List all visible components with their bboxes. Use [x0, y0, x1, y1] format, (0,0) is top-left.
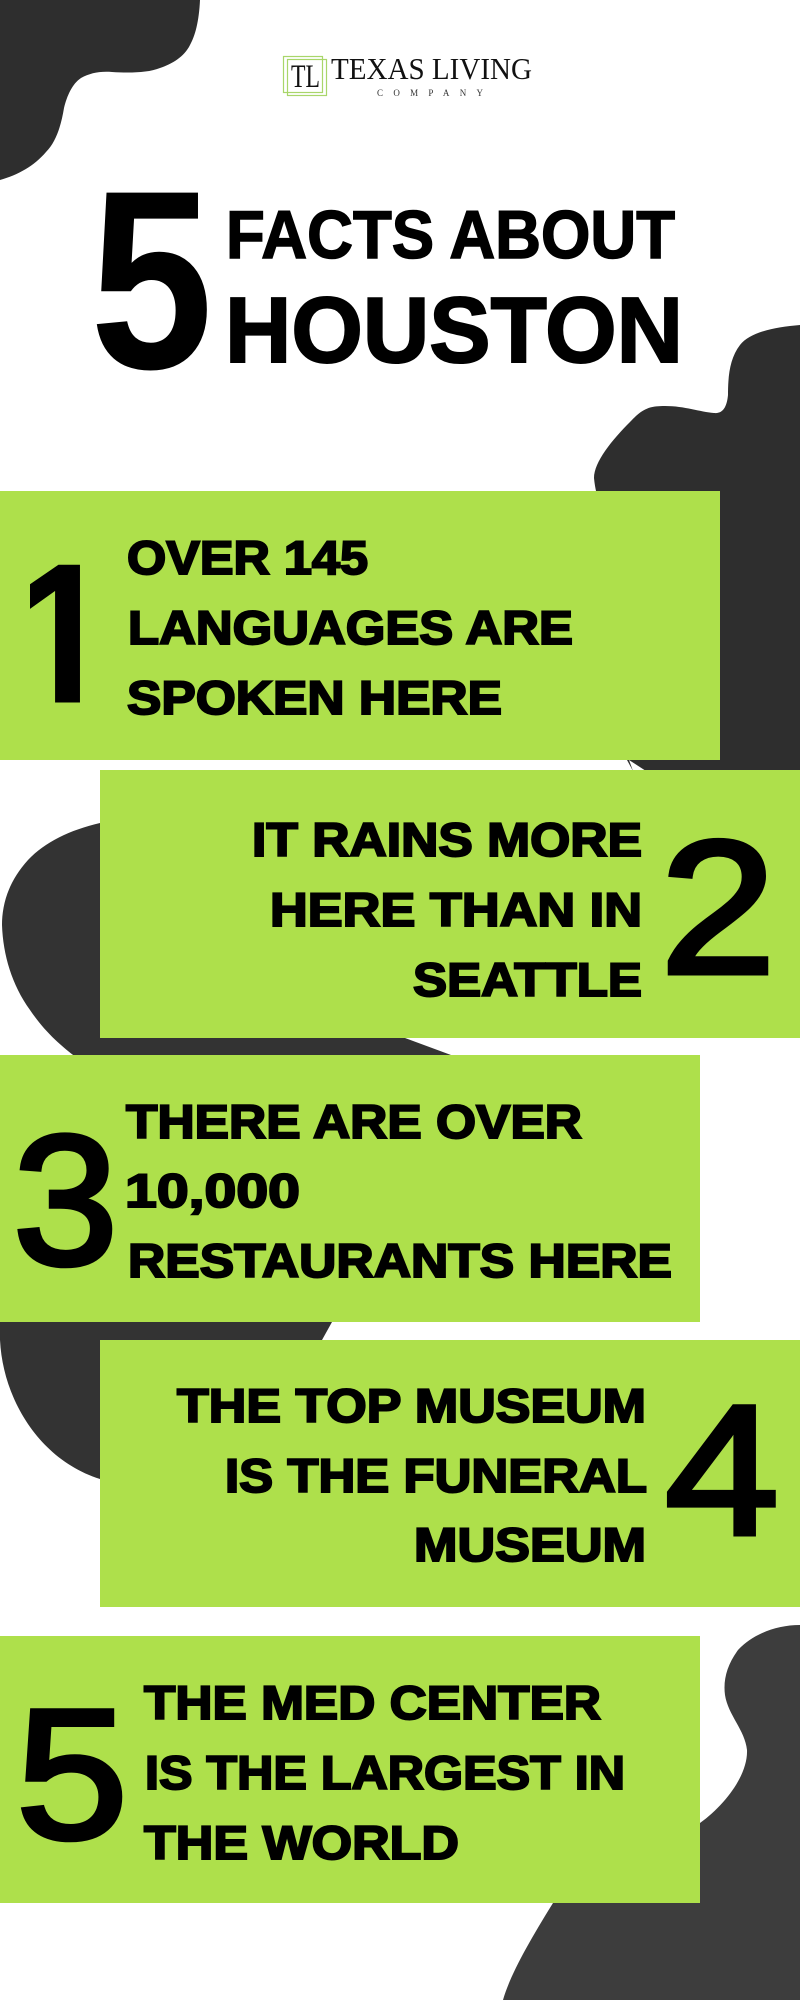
logo wordmark: TEXAS LIVING: [331, 51, 532, 86]
numeral 2: 2: [660, 802, 776, 1014]
title numeral 5: 5: [90, 138, 213, 423]
numeral 5: 5: [16, 1672, 128, 1878]
fact 2 text: IT RAINS MORE: [252, 813, 642, 866]
logo: Texas Living Company: [284, 51, 532, 98]
logo subtitle: COMPANY: [377, 88, 484, 98]
fact 3 text: 10,000: [125, 1164, 300, 1217]
fact 4 text: THE TOP MUSEUM: [177, 1379, 646, 1432]
panel: fact 2: [100, 770, 800, 1038]
fact 4 text: IS THE FUNERAL: [225, 1449, 647, 1502]
fact 5 text: IS THE LARGEST IN: [145, 1746, 625, 1799]
fact 2 text: SEATTLE: [413, 953, 642, 1006]
fact 1 text: LANGUAGES ARE: [128, 601, 573, 654]
numeral 4: 4: [665, 1368, 779, 1574]
logo mark: [284, 56, 326, 96]
panel: fact 5: [0, 1636, 700, 1903]
fact 5 text: THE MED CENTER: [144, 1676, 601, 1729]
blob: right behind first panel: [594, 325, 800, 771]
fact 3 text: THERE ARE OVER: [126, 1095, 582, 1148]
fact 4 text: MUSEUM: [414, 1518, 646, 1571]
panel: fact 1: [0, 491, 720, 770]
fact 3 text: RESTAURANTS HERE: [128, 1234, 672, 1287]
logo mark: TL: [291, 59, 320, 95]
numeral 1: 1: [1, 518, 126, 770]
panel: fact 3: [0, 1055, 700, 1322]
fact 1 text: SPOKEN HERE: [127, 671, 502, 724]
fact 3 text: [125, 1095, 672, 1287]
fact 4 text: [177, 1379, 647, 1571]
fact 2 text: [252, 813, 642, 1006]
blob: top left: [0, 0, 200, 180]
numeral 3: 3: [13, 1098, 118, 1304]
fact 2 text: HERE THAN IN: [270, 883, 642, 936]
blob: middle left: [0, 823, 451, 1479]
title: [90, 138, 683, 423]
title line: facts about: FACTS ABOUT: [226, 197, 675, 273]
title line: houston: HOUSTON: [225, 278, 683, 382]
blob: bottom right: [503, 1625, 800, 2000]
fact 5 text: [144, 1676, 625, 1869]
fact 1 text: [127, 531, 573, 724]
fact 5 text: THE WORLD: [144, 1816, 459, 1869]
fact 1 text: OVER 145: [127, 531, 368, 584]
panel: fact 4: [100, 1340, 800, 1607]
